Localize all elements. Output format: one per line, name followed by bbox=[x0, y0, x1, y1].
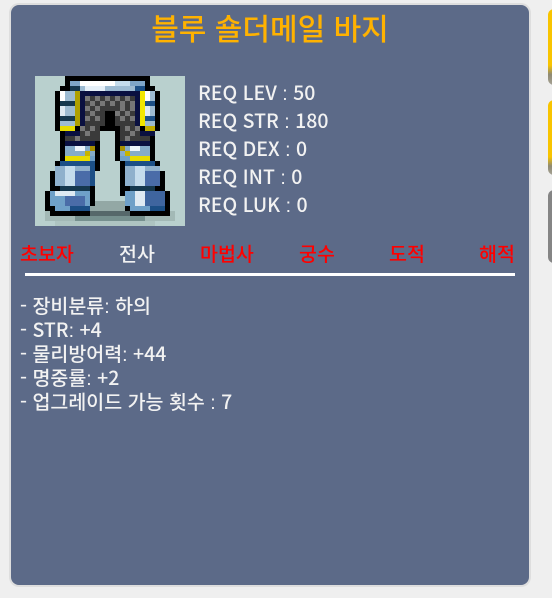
job: magician: 마법사 bbox=[200, 238, 254, 267]
divider line bbox=[25, 273, 515, 276]
item stats text block bbox=[20, 290, 232, 415]
icon: blue shoulder mail pants bbox=[35, 76, 185, 226]
stat: category: - 장비분류: 하의 bbox=[20, 290, 151, 319]
job: archer: 궁수 bbox=[299, 238, 335, 267]
stat: defense: - 물리방어력: +44 bbox=[20, 338, 166, 367]
title: 블루 숄더메일 바지 bbox=[151, 5, 389, 49]
job: warrior: 전사 bbox=[119, 238, 155, 267]
side button: yellow 1 bbox=[548, 9, 552, 85]
req luk: REQ LUK : 0 bbox=[198, 189, 308, 218]
req int: REQ INT : 0 bbox=[198, 161, 302, 190]
req dex: REQ DEX : 0 bbox=[198, 133, 307, 162]
job: thief: 도적 bbox=[389, 238, 425, 267]
stat: upgrades: - 업그레이드 가능 횟수 : 7 bbox=[20, 386, 232, 415]
left boot bbox=[50, 146, 95, 211]
req level: REQ LEV : 50 bbox=[198, 77, 315, 106]
hip guards bbox=[60, 91, 155, 146]
requirements list bbox=[198, 77, 328, 218]
job class row bbox=[20, 238, 515, 267]
stat: accuracy: - 명중률: +2 bbox=[20, 362, 119, 391]
crotch checker bbox=[65, 96, 150, 141]
right boot bbox=[120, 146, 165, 211]
stat: strength: - STR: +4 bbox=[20, 314, 102, 343]
side button: grey bbox=[548, 190, 552, 263]
waistband bbox=[70, 81, 145, 96]
job: pirate: 해적 bbox=[479, 238, 515, 267]
silhouette bbox=[45, 76, 170, 216]
req str: REQ STR : 180 bbox=[198, 105, 328, 134]
job: beginner: 초보자 bbox=[20, 238, 74, 267]
side button: yellow 2 bbox=[548, 100, 552, 175]
